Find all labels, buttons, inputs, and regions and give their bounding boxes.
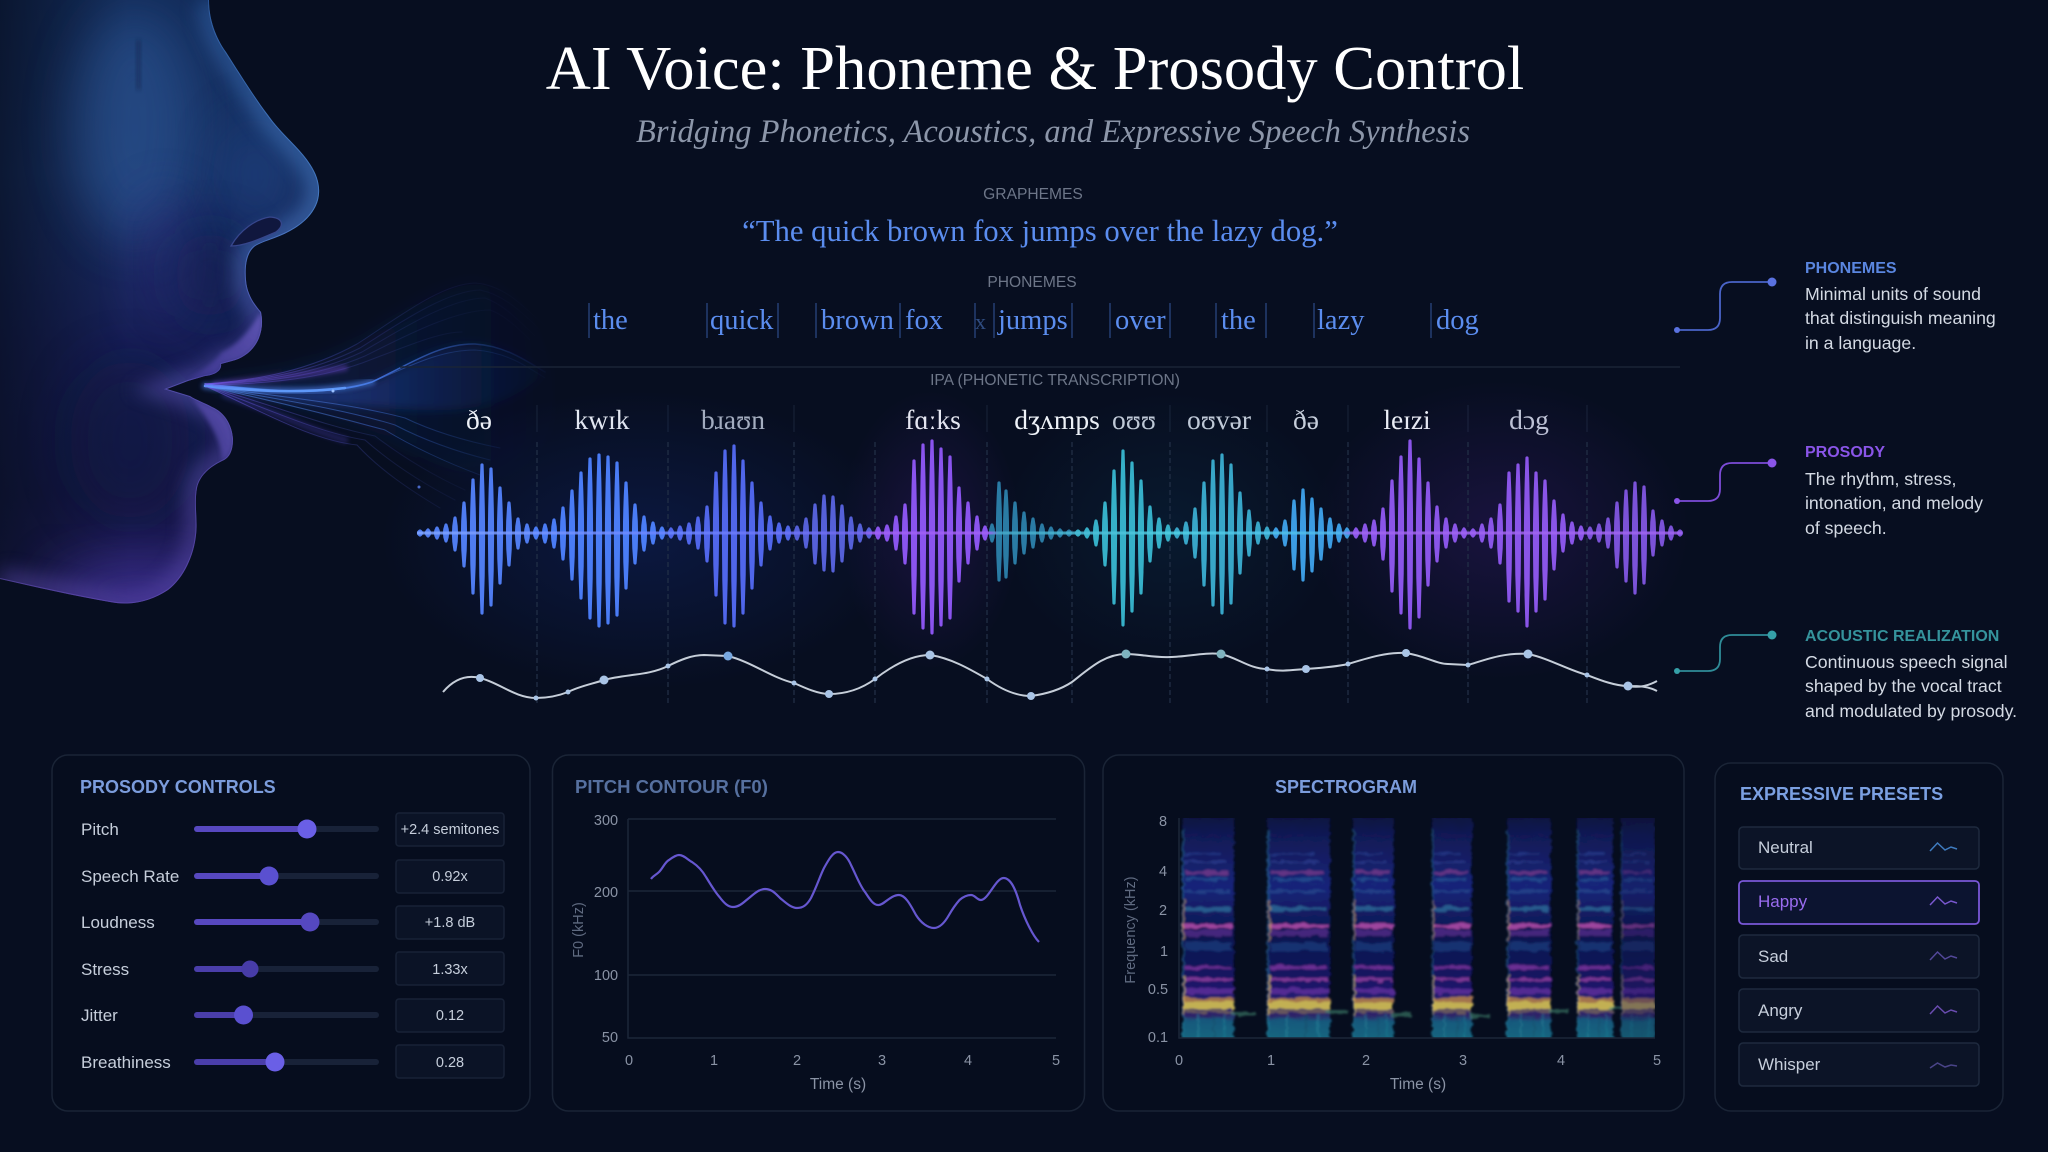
preset: neutral — [1739, 827, 1979, 869]
slider: breathiness — [81, 1045, 504, 1078]
burst: the — [418, 465, 528, 613]
burst: dog — [1472, 458, 1582, 626]
section label: IPA: IPA (PHONETIC TRANSCRIPTION) — [930, 372, 1180, 389]
line chart: 3 — [878, 1053, 886, 1069]
panel: expressive presets — [1715, 763, 2003, 1111]
line chart: Time (s) — [810, 1076, 866, 1093]
section label: graphemes: GRAPHEMES — [983, 186, 1083, 203]
title: AI Voice: Phoneme & Prosody Control — [546, 33, 1524, 103]
spectrogram axes: 4 — [1159, 864, 1167, 880]
burst: blue — [1274, 490, 1348, 580]
burst: lazy — [1354, 441, 1466, 628]
subtitle: Bridging Phonetics, Acoustics, and Expressive Speech Synthesis — [636, 114, 1470, 150]
IPA transcription row: oʊvər — [1187, 404, 1251, 435]
line chart: 1 — [710, 1053, 718, 1069]
line chart: 4 — [964, 1053, 972, 1069]
main pitch contour — [443, 649, 1657, 700]
spectrogram axes: 0.5 — [1148, 982, 1168, 998]
center line — [417, 532, 1682, 534]
burst: jumps onset — [990, 483, 1070, 580]
slider: loudness — [81, 906, 504, 939]
panel heading: EXPRESSIVE PRESETS — [1740, 784, 1943, 804]
burst: tail — [1588, 483, 1682, 593]
preset: sad: Sad — [1758, 947, 1788, 966]
phoneme word row: over — [1115, 305, 1166, 336]
spectrogram axes: 2 — [1159, 903, 1167, 919]
lower lip — [192, 399, 233, 460]
spectrogram axes: 5 — [1653, 1053, 1661, 1069]
slider: speech rate: 0.92x — [432, 869, 468, 885]
panel: spectrogram — [1103, 755, 1684, 1111]
callout: acoustic realization: Continuous speech signal — [1805, 652, 2008, 672]
preset: sad — [1739, 935, 1979, 978]
nostril — [231, 217, 281, 246]
IPA transcription row: ðə — [1293, 404, 1319, 435]
IPA transcription row: dʒʌmps — [1014, 404, 1100, 435]
panel heading: SPECTROGRAM — [1275, 777, 1417, 797]
slider: speech rate: Speech Rate — [81, 867, 179, 886]
IPA transcription row: fɑːks — [905, 404, 961, 435]
spectrogram axes — [1123, 814, 1661, 1093]
panel: pitch contour — [552, 755, 1084, 1111]
mouth corner shadow — [167, 388, 190, 396]
slider: breathiness: 0.28 — [436, 1055, 464, 1071]
callout: phonemes: in a language. — [1805, 333, 1916, 353]
phoneme word row: the — [1221, 305, 1256, 336]
slider: stress: Stress — [81, 960, 129, 979]
callout: phonemes: Minimal units of sound — [1805, 284, 1981, 304]
spectrogram axes: 1 — [1267, 1053, 1275, 1069]
line chart: 5 — [1052, 1053, 1060, 1069]
burst: brown — [670, 446, 790, 626]
spectrogram axes: Time (s) — [1390, 1076, 1446, 1093]
grapheme sentence: “The quick brown fox jumps over the lazy dog.” — [742, 214, 1338, 248]
spectrogram axes: 0 — [1175, 1053, 1183, 1069]
slider: pitch: +2.4 semitones — [401, 822, 499, 838]
preset: whisper — [1739, 1043, 1979, 1086]
IPA transcription row: ðə — [466, 404, 492, 435]
slider: jitter: Jitter — [81, 1006, 118, 1025]
callout: prosody: PROSODY — [1805, 444, 1885, 461]
callout: phonemes: that distinguish meaning — [1805, 308, 1996, 328]
line chart: 2 — [793, 1053, 801, 1069]
phoneme word row: dog — [1436, 305, 1479, 336]
phoneme word row: quick — [710, 305, 774, 336]
spectrogram heatmap — [1182, 800, 1655, 1045]
callout: acoustic realization: ACOUSTIC REALIZATION — [1805, 628, 1999, 645]
panel heading: PROSODY CONTROLS — [80, 777, 276, 797]
slider: jitter — [81, 999, 504, 1032]
callout: acoustic realization: shaped by the vocal tract — [1805, 676, 2002, 696]
word boundary guides — [537, 442, 1587, 705]
line chart: 200 — [594, 885, 618, 901]
upper lip — [194, 313, 262, 379]
spectrogram axes: 1 — [1160, 944, 1168, 960]
line chart — [571, 813, 1060, 1093]
slider: stress — [81, 952, 504, 985]
callout: prosody: The rhythm, stress, — [1805, 469, 1956, 489]
section label: phonemes: PHONEMES — [987, 274, 1077, 291]
slider: pitch: Pitch — [81, 820, 119, 839]
panel: prosody controls — [52, 755, 530, 1111]
phoneme word row: fox — [905, 305, 943, 336]
burst: the teal-blue — [1176, 455, 1268, 613]
waveform — [417, 441, 1682, 633]
callout: prosody — [1674, 444, 1983, 538]
panel heading: PITCH CONTOUR (F0) — [575, 776, 768, 797]
spectrogram axes: 4 — [1557, 1053, 1565, 1069]
spectrogram axes: Frequency (kHz) — [1123, 876, 1139, 984]
burst: unvoiced gap — [796, 496, 870, 571]
line chart: F0 (kHz) — [571, 902, 587, 958]
preset: whisper: Whisper — [1758, 1055, 1821, 1074]
slider: stress: 1.33x — [432, 962, 468, 978]
line chart: 100 — [594, 968, 618, 984]
callout: phonemes: PHONEMES — [1805, 260, 1897, 277]
waveform glow — [380, 380, 1690, 690]
callout: prosody: intonation, and melody — [1805, 493, 1983, 513]
IPA transcription row: dɔg — [1509, 404, 1549, 435]
preset: angry — [1739, 989, 1979, 1032]
IPA transcription row — [466, 404, 1587, 435]
slider: pitch — [81, 813, 504, 846]
IPA transcription row: oʊʊ — [1112, 404, 1156, 435]
spectrogram axes: 3 — [1459, 1053, 1467, 1069]
preset: neutral: Neutral — [1758, 838, 1813, 857]
slider: jitter: 0.12 — [436, 1008, 464, 1024]
callout: acoustic realization: and modulated by prosody. — [1805, 701, 2017, 721]
phoneme word row: lazy — [1317, 305, 1365, 336]
callout: acoustic realization — [1674, 628, 2017, 721]
spectrogram axes: 8 — [1159, 814, 1167, 830]
spectrogram axes: 2 — [1362, 1053, 1370, 1069]
line chart: 0 — [625, 1053, 633, 1069]
IPA transcription row: leɪzi — [1383, 404, 1431, 435]
preset: happy (selected) — [1739, 881, 1979, 924]
IPA transcription row: bɹaʊn — [701, 404, 765, 435]
illustration: voice breath stream — [205, 283, 559, 508]
preset: angry: Angry — [1758, 1001, 1803, 1020]
illustration: face profile — [0, 0, 340, 620]
phoneme word row: x — [975, 309, 986, 334]
burst: quick — [534, 455, 664, 626]
burst: over teal — [1076, 451, 1170, 625]
callout: prosody: of speech. — [1805, 518, 1887, 538]
slider: loudness: Loudness — [81, 913, 155, 932]
slider: loudness: +1.8 dB — [425, 915, 475, 931]
IPA transcription row: kwɪk — [574, 404, 630, 435]
burst: fox — [876, 441, 986, 633]
line chart: 300 — [594, 813, 618, 829]
preset: happy (selected): Happy — [1758, 892, 1808, 911]
phoneme word row: brown — [821, 305, 894, 336]
line chart: 50 — [602, 1030, 618, 1046]
phoneme word row: the — [593, 305, 628, 336]
phoneme word row — [589, 303, 1479, 338]
phoneme word row: jumps — [997, 305, 1068, 336]
slider: speech rate — [81, 860, 504, 893]
slider: breathiness: Breathiness — [81, 1053, 171, 1072]
spectrogram axes: 0.1 — [1148, 1030, 1168, 1046]
callout: phonemes — [1674, 260, 1996, 353]
